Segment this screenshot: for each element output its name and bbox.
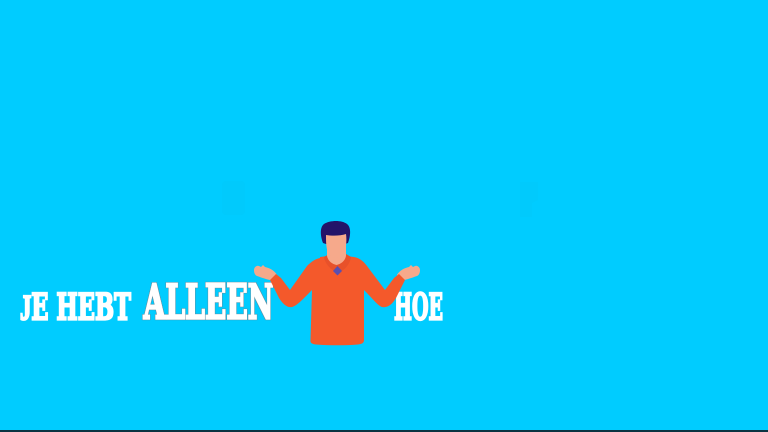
neck and chin [327, 245, 346, 265]
figure: shrugging man [254, 221, 420, 345]
sweater [270, 256, 405, 345]
collar [324, 254, 351, 273]
tie knot [333, 266, 342, 276]
bottom edge line [0, 430, 768, 432]
right hand [397, 265, 420, 281]
text: ALLEEN: ALLEEN [143, 274, 274, 330]
left hand [254, 265, 277, 281]
text: HOE: HOE [394, 286, 443, 328]
faint ghost mark right [520, 182, 538, 217]
face [326, 234, 346, 258]
faint ghost mark left [222, 181, 245, 215]
text: JE HEBT: JE HEBT [20, 286, 131, 328]
hair [321, 221, 350, 244]
